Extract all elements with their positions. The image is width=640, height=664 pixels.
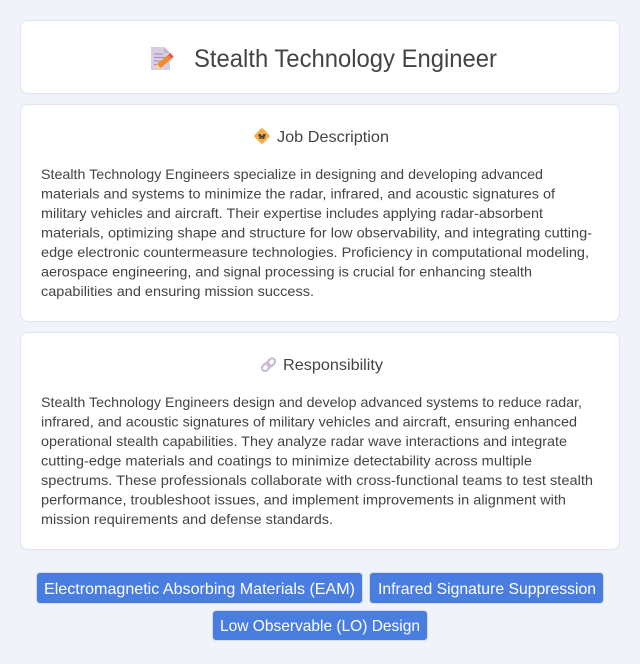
title: Stealth Technology Engineer bbox=[194, 45, 497, 73]
text block: job description body: materials, optimizing shape and structure for low observability, and integrating cutting- bbox=[41, 224, 592, 240]
tag: low observable design bbox=[212, 610, 428, 641]
text block: job description body: Stealth Technology Engineers specialize in designing and developing advanced bbox=[41, 166, 543, 182]
text block: responsibility body: infrared, and acoustic signatures of military vehicles and aircraft, ensuring enhanced bbox=[41, 414, 577, 430]
text block: job description body: capabilities and ensuring mission success. bbox=[41, 283, 314, 299]
icon: chain link bbox=[261, 357, 276, 372]
text block: responsibility body: Stealth Technology Engineers design and develop advanced systems to reduce radar, bbox=[41, 394, 582, 410]
text block: responsibility body: spectrums. These professionals collaborate with cross-functional teams to test stealth bbox=[41, 472, 593, 488]
tag: infrared signature suppression bbox=[369, 572, 604, 604]
text block: job description body: edge electronic countermeasure technologies. Proficiency in computational modeling, bbox=[41, 244, 589, 260]
icon: orange diamond bbox=[254, 128, 270, 144]
panel: responsibility bbox=[20, 332, 620, 550]
text block: job description body: military vehicles and aircraft. Their expertise includes applying radar-absorbent bbox=[41, 205, 543, 221]
text block: job description body bbox=[41, 166, 592, 299]
tag: infrared signature suppression: Infrared Signature Suppression bbox=[378, 581, 596, 598]
text block: responsibility body: mission requirements and defense standards. bbox=[41, 511, 333, 527]
text block: responsibility body bbox=[41, 394, 593, 527]
tag: low observable design: Low Observable (LO) Design bbox=[220, 618, 420, 635]
text block: responsibility body: operational stealth capabilities. They analyze radar wave interactions and integrate bbox=[41, 433, 567, 449]
panel: title card bbox=[20, 20, 620, 94]
heading: responsibility: Responsibility bbox=[283, 357, 383, 374]
icon: memo with pencil bbox=[151, 47, 174, 70]
tag: electromagnetic absorbing materials: Electromagnetic Absorbing Materials (EAM) bbox=[44, 581, 355, 598]
text block: responsibility body: performance, troubleshoot issues, and implement improvements in alignment with bbox=[41, 492, 566, 508]
panel: job description bbox=[20, 104, 620, 322]
text block: job description body: aerospace engineering, and signal processing is crucial for enhancing stealth bbox=[41, 264, 532, 280]
text block: job description body: materials and systems to minimize the radar, infrared, and acoustic signatures of bbox=[41, 186, 555, 202]
tag: electromagnetic absorbing materials bbox=[36, 572, 363, 604]
text block: responsibility body: cutting-edge materials and coatings to minimize detectability across multiple bbox=[41, 452, 532, 468]
heading: job description: Job Description bbox=[277, 129, 389, 146]
